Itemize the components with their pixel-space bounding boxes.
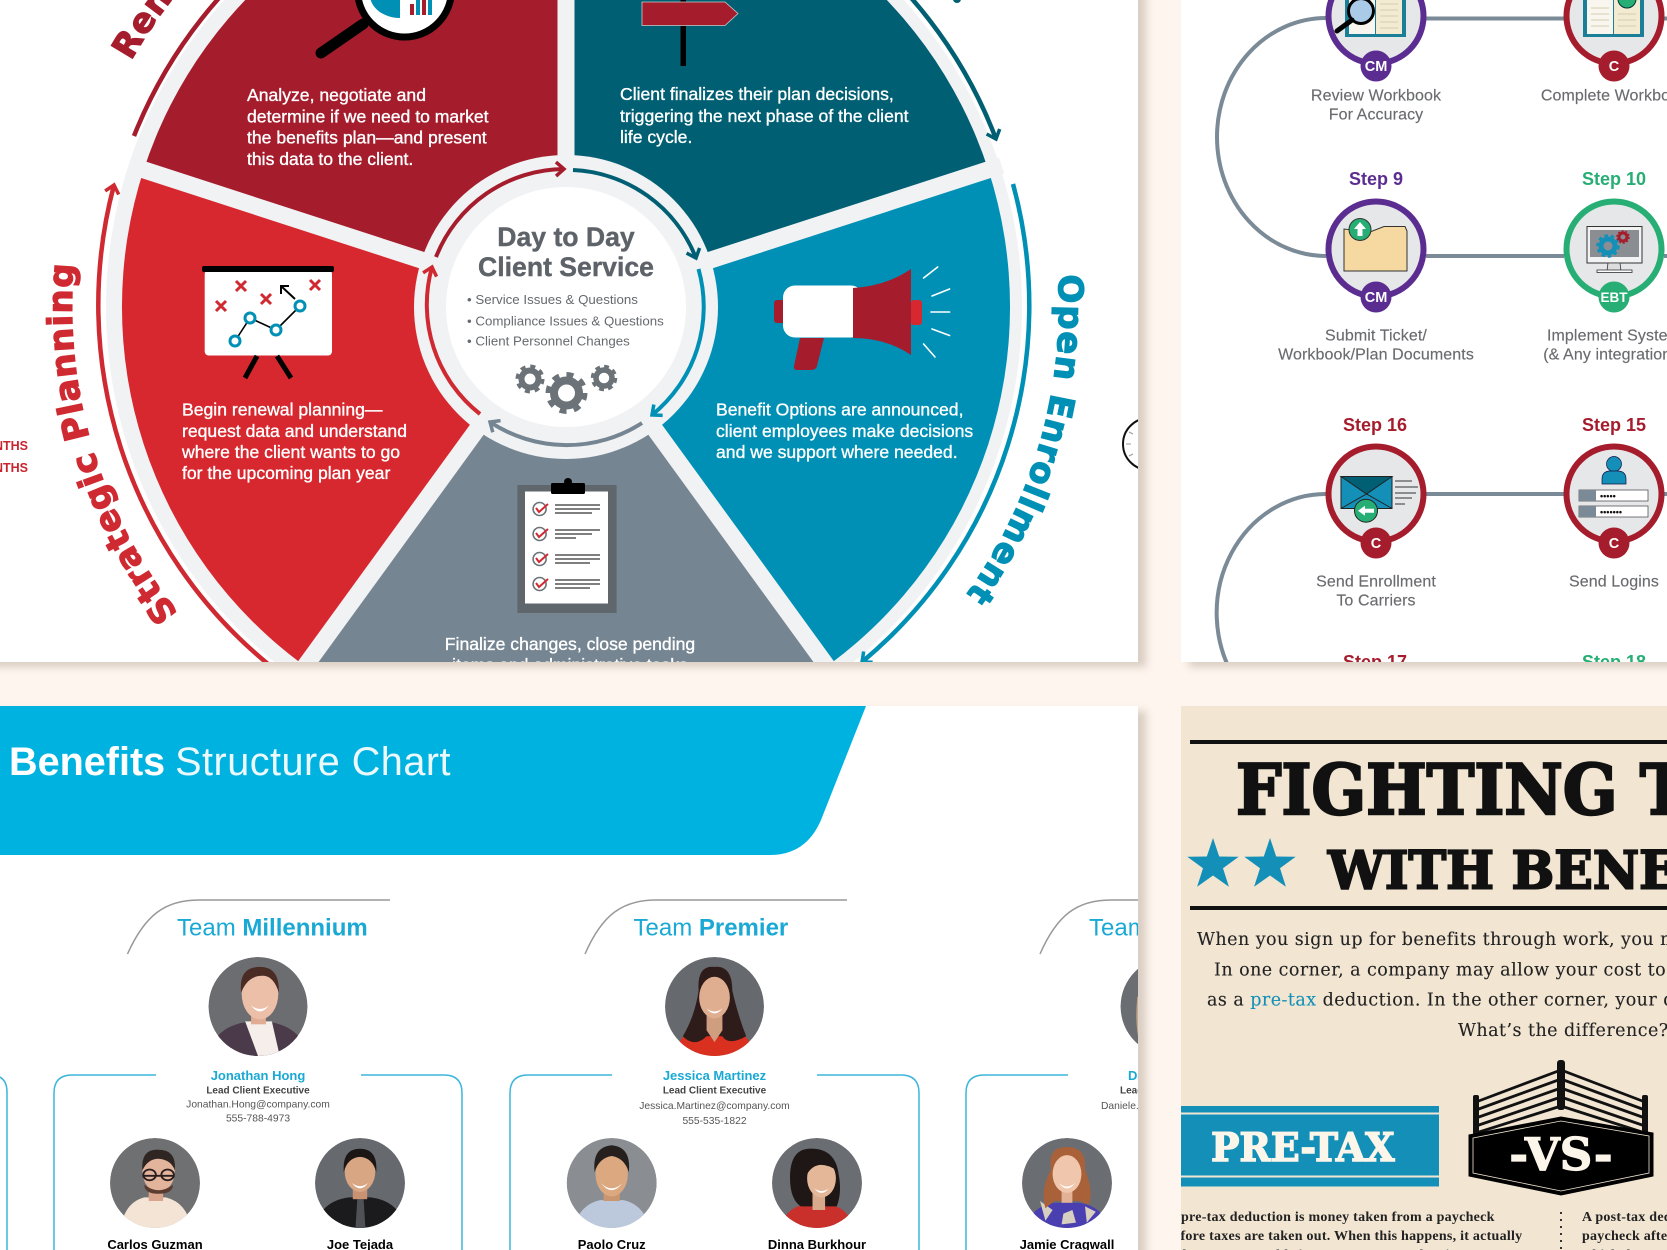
intro paragraph: What’s the difference?	[1458, 1021, 1667, 1041]
caption: Send Enrollment	[1316, 574, 1436, 590]
lead details: 555-535-1822	[682, 1116, 747, 1127]
caption: Submit Ticket/	[1325, 328, 1427, 344]
badge	[1598, 528, 1630, 558]
icon: magnifier with charts	[321, 0, 452, 53]
team premier	[510, 900, 919, 1250]
panel: benefits structure chart	[0, 706, 1302, 1250]
badge: CM	[1365, 290, 1387, 306]
step 10	[1543, 169, 1667, 364]
icon: clipboard checklist	[517, 478, 617, 613]
bottom rule	[1190, 906, 1667, 910]
text: strategic planning	[181, 400, 407, 483]
text: strategic planning: request data and understand	[182, 421, 407, 441]
icon: stars	[1187, 838, 1296, 887]
step label: Step 9	[1349, 169, 1403, 189]
icon: folder upload	[1344, 218, 1407, 271]
portrait: Jonathan Hong	[208, 957, 308, 1056]
icon: boxing ring vs	[1469, 1060, 1653, 1195]
icon: signpost	[642, 0, 738, 66]
badge	[1360, 50, 1392, 82]
label: open enrollment: Open Enrollment	[966, 276, 1085, 606]
outer arrow: renewal	[132, 0, 220, 137]
step label: Step 10	[1582, 169, 1646, 189]
caption	[1316, 574, 1436, 610]
hub list: • Compliance Issues & Questions	[467, 314, 664, 328]
outer ring	[106, 0, 1022, 662]
step 16	[1316, 415, 1436, 610]
portrait: Jessica Martinez	[665, 957, 764, 1056]
lead details partial	[1101, 1068, 1239, 1112]
icon: monitor with gears	[1587, 226, 1642, 272]
text: strategic planning: where the client wants to go	[181, 442, 400, 462]
column: pre-tax text: before taxes are taken out. When this happens, it actually	[1166, 1229, 1522, 1244]
column: pre-tax text: pre-tax deduction is money taken from a paycheck	[1181, 1210, 1495, 1225]
badge: C	[1609, 59, 1620, 75]
outer arrow: strategic planning	[98, 185, 268, 664]
lead details: Jonathan Hong	[211, 1068, 305, 1083]
icon: clock edge	[1122, 419, 1138, 469]
inner arrows	[427, 169, 704, 445]
column: pre-tax text	[1166, 1210, 1522, 1250]
lead details: Jessica Martinez	[663, 1068, 767, 1083]
text: open enrollment: Benefit Options are announced,	[716, 400, 963, 420]
team box	[54, 1075, 462, 1250]
panel: fighting taxes with benefits	[1166, 706, 1667, 1250]
panel: client life cycle wheel	[0, 0, 1138, 662]
side note: months	[0, 441, 28, 472]
portrait: Joe Tejada	[315, 1138, 405, 1228]
badge	[1360, 528, 1392, 558]
text: renewal	[247, 85, 489, 169]
text: finalize: Finalize changes, close pending	[445, 634, 695, 654]
portrait: Paolo Cruz	[567, 1138, 657, 1228]
portrait: Dinna Burkhour	[772, 1138, 862, 1228]
lead details: Lead Client Executive	[206, 1086, 310, 1096]
caption: For Accuracy	[1329, 106, 1423, 124]
lead details	[639, 1068, 790, 1127]
text: open enrollment: client employees make decisions	[716, 421, 973, 441]
badge	[1360, 282, 1392, 312]
step 9	[1278, 169, 1474, 364]
portrait: Carlos Guzman	[110, 1138, 200, 1228]
team name: Team Premier	[634, 914, 788, 942]
hub list	[467, 292, 664, 348]
team name: Team Millennium	[177, 914, 368, 942]
text: decisions: Client finalizes their plan decisions,	[620, 84, 894, 104]
lead details: 555-788-4973	[226, 1114, 290, 1124]
text: renewal: the benefits plan—and present	[247, 128, 487, 148]
text: finalize	[446, 636, 694, 662]
icon: book with magnifier	[1337, 0, 1406, 37]
lead details partial: Daniele	[1128, 1068, 1174, 1083]
connector path	[1217, 18, 1667, 672]
badge: EBT	[1600, 290, 1628, 305]
lead details	[186, 1068, 330, 1124]
team arc	[1040, 900, 1302, 954]
intro paragraph	[1197, 930, 1667, 1041]
team box	[966, 1075, 1068, 1250]
text: decisions	[620, 84, 909, 147]
text: strategic planning: for the upcoming plan year	[182, 463, 390, 483]
badge	[1598, 50, 1630, 82]
hub list: • Client Personnel Changes	[467, 334, 630, 348]
caption: Send Logins	[1569, 574, 1659, 590]
text: decisions: triggering the next phase of the client	[620, 106, 909, 126]
title: Benefits Structure Chart	[9, 740, 451, 784]
text: finalize: items and administrative tasks	[452, 655, 688, 675]
panel: implementation steps	[1217, 0, 1667, 672]
caption	[1543, 328, 1667, 364]
text: strategic planning: Begin renewal planning—	[182, 400, 383, 420]
lead details: Jonathan.Hong@company.com	[186, 1100, 330, 1110]
team arc	[128, 900, 390, 954]
icon: gears	[518, 366, 616, 412]
caption: Review Workbook	[1311, 88, 1442, 104]
caption	[1278, 328, 1474, 364]
step: complete workbook	[1541, 0, 1667, 104]
step label: Step 15	[1582, 415, 1646, 435]
icon: login fields: •••••••	[1600, 507, 1622, 517]
step: review workbook	[1311, 0, 1442, 124]
pre-tax banner	[1181, 1106, 1439, 1186]
text: open enrollment: and we support where needed.	[716, 442, 958, 462]
caption: Workbook/Plan Documents	[1278, 346, 1474, 364]
lead details partial: Daniele.Smith@company.com	[1101, 1101, 1239, 1112]
portrait: Jamie Cragwall	[1022, 1138, 1112, 1228]
outer arrow: decisions	[910, 0, 1002, 142]
badge: C	[1609, 536, 1620, 552]
badge: CM	[1365, 59, 1387, 75]
icon: login fields	[1579, 456, 1648, 517]
step 18 label: Step 18	[1582, 652, 1646, 672]
team third	[966, 900, 1302, 1250]
text: renewal: determine if we need to market	[247, 106, 489, 126]
text: open enrollment	[716, 400, 973, 462]
step 17 label: Step 17	[1343, 652, 1407, 672]
team box	[510, 1075, 919, 1250]
sector: finalize (gray)	[318, 434, 814, 662]
sector: decisions (teal)	[574, 0, 986, 252]
text: renewal: Analyze, negotiate and	[247, 85, 426, 105]
icon: book with check	[1583, 0, 1644, 37]
label fragment: decisions	[953, 0, 961, 3]
icon: boxing ring vs: -VS-	[1509, 1128, 1613, 1181]
icon: strategy board	[202, 266, 334, 378]
label: strategic planning: Strategic Planning	[46, 265, 176, 624]
lead details partial: Lead Client Executive	[1120, 1086, 1224, 1096]
team arc	[585, 900, 847, 954]
hub list: • Service Issues & Questions	[467, 292, 638, 307]
top rule	[1190, 740, 1667, 744]
text: decisions: life cycle.	[620, 127, 692, 147]
pre-tax banner: PRE-TAX	[1211, 1125, 1395, 1171]
column: post-tax text	[1582, 1210, 1667, 1250]
caption	[1311, 88, 1442, 124]
team name: Team Alliance	[1089, 914, 1246, 942]
center hub	[414, 155, 718, 459]
icon: megaphone	[774, 267, 950, 370]
team millennium	[54, 900, 462, 1250]
badge: C	[1371, 536, 1382, 552]
badge	[1598, 282, 1630, 312]
lead details: Lead Client Executive	[663, 1086, 767, 1096]
sector: renewal (dark red)	[146, 0, 558, 252]
icon: envelope send	[1341, 476, 1418, 522]
step label: Step 16	[1343, 415, 1407, 435]
lead details: Jessica.Martinez@company.com	[639, 1101, 790, 1112]
previous box edge	[0, 1075, 7, 1250]
step 15	[1566, 415, 1662, 590]
hub heading: Day to Day	[497, 222, 635, 252]
icon: login fields: •••••	[1600, 491, 1616, 501]
caption: To Carriers	[1336, 592, 1416, 610]
portrait: lead partial	[1120, 957, 1220, 1056]
sector: open enrollment (blue)	[662, 178, 1010, 662]
header banner	[0, 706, 866, 855]
outer arrow: open enrollment	[862, 184, 1029, 662]
text: renewal: this data to the client.	[247, 149, 413, 169]
dotted divider	[1560, 1212, 1562, 1250]
sector: strategic planning (red)	[122, 178, 470, 662]
hub heading line 2: Client Service	[478, 252, 654, 282]
